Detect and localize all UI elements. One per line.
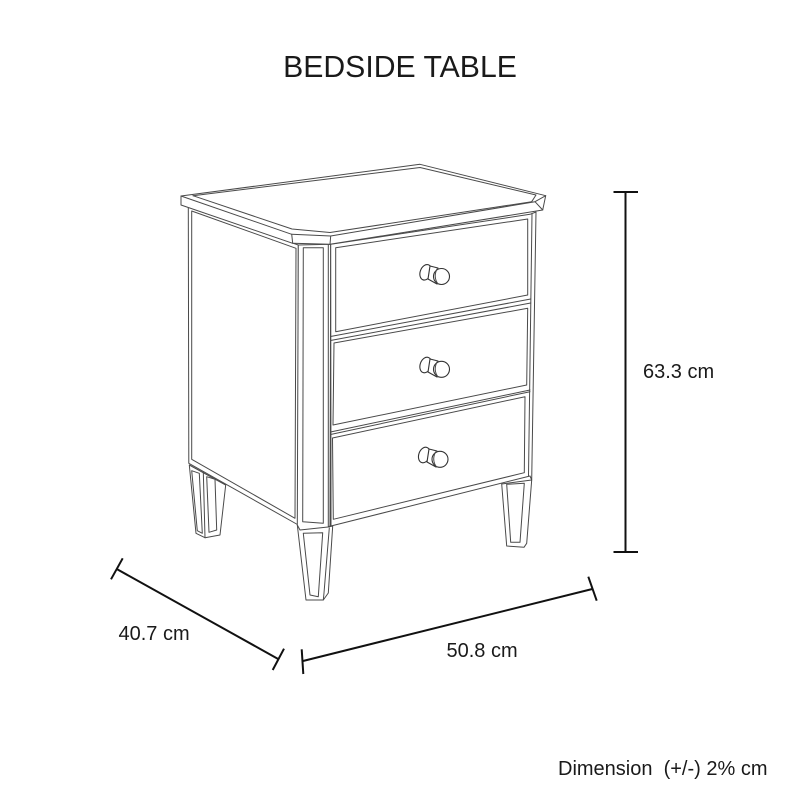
footnote: Dimension (+/-) 2% cm xyxy=(558,758,768,780)
dimension label: width: 50.8 cm xyxy=(446,640,518,662)
front leg xyxy=(297,525,333,600)
front frame xyxy=(331,212,536,526)
back left leg xyxy=(189,465,226,538)
drawer divider 1 xyxy=(330,299,531,340)
knob 1 xyxy=(418,263,450,284)
side panel xyxy=(188,207,298,525)
drawer 3 xyxy=(332,397,525,519)
dimension line: width xyxy=(302,577,597,674)
back right leg xyxy=(502,480,532,547)
title: BEDSIDE TABLE xyxy=(283,51,517,84)
dimension line: depth xyxy=(111,558,284,670)
knob 2 xyxy=(418,356,450,377)
drawer 1 xyxy=(336,219,528,332)
dimension label: height: 63.3 cm xyxy=(643,361,714,383)
dimension line: height xyxy=(614,192,638,552)
drawer divider 2 xyxy=(330,390,530,434)
knob 3 xyxy=(416,446,448,467)
table top xyxy=(181,164,546,244)
illustration: bedside table xyxy=(181,164,546,600)
corner post xyxy=(297,244,331,530)
drawer 2 xyxy=(333,308,528,425)
dimension label: depth: 40.7 cm xyxy=(118,623,190,645)
